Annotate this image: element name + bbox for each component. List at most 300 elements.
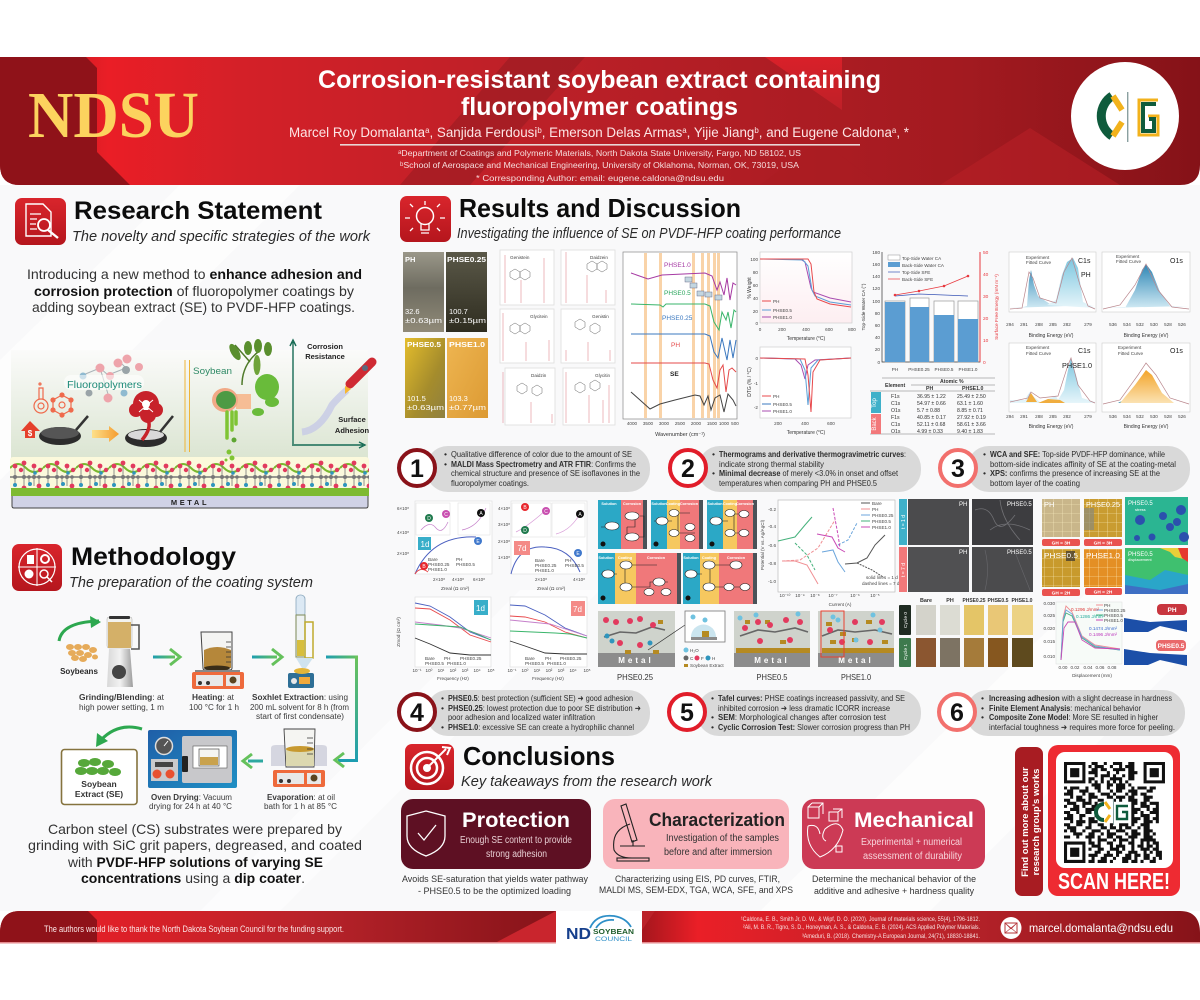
chart: TGA weight loss: 0	[755, 321, 758, 326]
panel: conclusions	[401, 741, 1180, 896]
text: mechanical note: Determine the mechanical behavior of the	[812, 874, 976, 884]
chart: ATR-FTIR spectra	[623, 252, 739, 438]
chart: water contact angle and surface free energy: 60	[875, 323, 880, 328]
chart: EIS Bode 7d: Frequency (Hz)	[532, 676, 564, 681]
card: mechanical: assessment of durability	[863, 851, 962, 862]
chart: XPS spectra: Binding Energy (eV)	[1124, 333, 1169, 339]
footer banner	[0, 911, 1200, 947]
chart: ATR-FTIR spectra: 2500	[675, 421, 686, 426]
photos: coating thickness: PH	[405, 255, 415, 264]
chart: peel force vs displacement: 0.04	[1084, 665, 1093, 670]
chart: ATR-FTIR spectra: PHSE0.5	[664, 290, 691, 297]
chart: XPS spectra: O1s	[1170, 258, 1183, 265]
chart: EIS Nyquist 1d: 4×10⁸	[397, 530, 409, 535]
chart: TGA weight loss: 20	[753, 309, 758, 314]
callout 2: temperatures when comparing PH and PHSE0.5	[719, 478, 877, 488]
chart: derivative thermogravimetry: 600	[827, 421, 835, 426]
QR code	[1064, 762, 1165, 863]
chart: derivative thermogravimetry: DTG (% / °C)	[747, 367, 753, 397]
chart: peel force vs displacement: PHSE1.0	[1104, 618, 1123, 623]
table: atomic percent: PHSE1.0	[962, 386, 983, 392]
chart: peel force vs displacement: 0.00	[1059, 665, 1068, 670]
callout 4: PHSE0.25: lowest protection due to poor SE distribution ➜	[448, 703, 641, 713]
chart: ATR-FTIR spectra: 1500	[707, 421, 718, 426]
callout 4: PHSE1.0: excessive SE can create a hydrophilic channel	[448, 722, 634, 732]
authors: b	[754, 126, 759, 135]
chart: TGA weight loss: Temperature (°C)	[787, 336, 826, 342]
chart: peel force vs displacement: 0.1286 J/mm²	[1076, 614, 1105, 619]
images: cyclic corrosion test photos: Bare	[920, 598, 932, 604]
text: protection note: Avoids SE-saturation that yields water pathway	[402, 874, 588, 884]
chart: XPS spectra: C1s	[1078, 258, 1091, 265]
chart: EIS Bode 1d: PHSE0.25	[460, 656, 482, 661]
chart: XPS spectra: Fitted Curve	[1116, 259, 1141, 264]
step: grinding and blending: Grinding/Blending : at	[79, 693, 165, 702]
affiliations: ᵇSchool of Aerospace and Mechanical Engineering, University of Oklahoma, Norman, OK, 73019, USA	[400, 160, 799, 170]
chart: EIS Nyquist 7d: PHSE0.25	[535, 563, 557, 568]
diagram: equivalent circuits	[598, 500, 757, 604]
callout 4: •	[441, 693, 444, 703]
images: cyclic corrosion test photos	[899, 598, 1033, 667]
chart: EIS Nyquist 1d: C	[444, 512, 448, 518]
table: atomic percent: 54.97 ± 0.66	[917, 401, 946, 407]
QR centre logo	[1096, 799, 1128, 825]
chart: EIS Bode 1d: Zmod (Ω cm²)	[396, 617, 402, 647]
chart: Tafel polarization curves: 10⁻⁵	[870, 593, 880, 598]
chart: Tafel polarization curves: Potential (V vs. Ag/AgCl)	[760, 519, 765, 570]
chart: Tafel polarization curves: solid lines = 1 d	[866, 575, 898, 580]
table: atomic percent: C1s	[891, 401, 901, 407]
references: ³Ameduri, B. (2018). Chemistry-A European Journal, 24(71), 18830-18841.	[802, 933, 980, 940]
table: atomic percent: O1s	[891, 408, 901, 414]
chart: EIS Nyquist 7d: 3×10⁸	[498, 522, 510, 527]
table: atomic percent: F1s	[891, 394, 900, 400]
photos: coating thickness: PHSE0.5	[407, 340, 441, 349]
chart: EIS Bode 1d: Bare	[425, 656, 435, 661]
authors: , Emerson Delas Armas	[542, 125, 683, 140]
chart: XPS spectra: 528	[1164, 414, 1172, 419]
chart: EIS Nyquist 1d: 1d	[420, 540, 429, 549]
diagram: peel simulation PH and PHSE0.5: PH	[1167, 607, 1177, 614]
chart: TGA weight loss: 800	[848, 327, 856, 332]
chart: EIS Bode 1d: 10⁰	[426, 668, 433, 673]
chart: EIS Nyquist 7d: 4×10⁸	[498, 506, 510, 511]
chart: EIS Bode 7d: Bare	[525, 656, 535, 661]
diagram: PHSE0.5 coating	[734, 611, 810, 682]
images: SEM micrographs: PH	[959, 550, 967, 556]
images: cross-hatch adhesion test: GH = 2H	[1052, 590, 1071, 596]
chart: Tafel polarization curves: PHSE0.5	[872, 519, 891, 524]
metal substrate: METAL	[171, 498, 209, 507]
chart: ATR-FTIR spectra: 1000	[719, 421, 730, 426]
card: mechanical: Experimental + numerical	[861, 837, 962, 848]
chart: water contact angle and surface free energy: 30	[983, 294, 989, 300]
photos: coating thickness: 32.6	[405, 307, 420, 316]
card: protection: Protection	[462, 809, 570, 832]
chart: ATR-FTIR spectra: 3000	[659, 421, 670, 426]
ND Soybean Council logo: SOYBEAN	[593, 927, 634, 936]
chart: water contact angle and surface free energy: Back-Side SFE	[902, 277, 933, 282]
chart: Tafel polarization curves: 10⁻⁸	[810, 593, 820, 598]
photos: coating thickness: ±0.63µm	[407, 403, 444, 412]
callout 5: •	[711, 722, 714, 732]
chart: peel force vs displacement: Displacement (mm)	[1072, 673, 1112, 678]
chart: EIS Bode 1d: PHSE1.0	[447, 661, 466, 666]
chart: peel force vs displacement: 0.02	[1071, 665, 1080, 670]
images: cyclic corrosion test photos: PHSE0.5	[988, 598, 1008, 604]
chart: EIS Bode 1d: 1d	[476, 604, 485, 613]
chart: EIS Bode 7d: 10⁻¹	[507, 668, 517, 673]
text: protection note	[402, 874, 588, 896]
step: soxhlet extraction: start of first condensate)	[256, 712, 344, 721]
images: cross-hatch adhesion test: GH = 3H	[1094, 540, 1113, 546]
panel: results and discussion	[396, 193, 1190, 736]
chart: ATR-FTIR spectra: 500	[731, 421, 739, 426]
chart: EIS Bode 7d: PH	[545, 656, 551, 661]
diagram: equivalent circuits: Corrosion	[736, 502, 755, 506]
arrow	[252, 649, 282, 665]
diagram: equivalent circuits: Coating	[702, 556, 717, 560]
chart: EIS Nyquist 1d: Zreal (Ω cm²)	[441, 586, 470, 592]
callout 2: •	[712, 449, 715, 459]
callout 1: Qualitative difference of color due to the amount of SE	[451, 449, 632, 459]
chart: EIS Bode 7d: 10²	[546, 668, 553, 673]
callout 1: MALDI Mass Spectrometry and ATR FTIR: Confirms the	[451, 459, 636, 469]
chart: water contact angle and surface free energy: PHSE1.0	[959, 367, 978, 372]
callout 6: Finite Element Analysis: mechanical behavior	[989, 703, 1141, 713]
images: SEM micrographs: PHSE0.5	[1007, 502, 1032, 508]
diagram: PHSE0.25 coating	[598, 611, 725, 682]
ND Soybean Council logo	[566, 916, 634, 943]
callout 6: •	[981, 693, 984, 703]
chart: EIS Bode 7d: 7d	[573, 605, 582, 614]
authors: Marcel Roy Domalanta	[289, 125, 426, 140]
callout 4	[399, 690, 650, 736]
chart: corrosion resistance vs surface adhesion	[290, 340, 372, 448]
photos: coating thickness: ±0.77µm	[449, 403, 486, 412]
arrow	[153, 649, 180, 665]
chart: EIS Nyquist 7d: PHSE1.0	[535, 568, 554, 573]
heading: Methodology	[71, 543, 236, 571]
chart: XPS spectra: PHSE1.0	[1062, 363, 1092, 370]
heading: Research Statement	[74, 197, 323, 225]
chart: EIS Bode 1d: 10⁴	[473, 668, 481, 673]
label: fluoropolymers: Fluoropolymers	[67, 379, 142, 391]
chart: water contact angle and surface free energy	[861, 250, 1000, 372]
step: oven drying	[148, 730, 237, 811]
table: atomic percent: 5.7 ± 0.88	[917, 408, 940, 414]
chart: peel force vs displacement: 0.1474 J/mm²	[1089, 626, 1118, 631]
images: SEM micrographs: t = 7 d	[901, 563, 907, 577]
chart: derivative thermogravimetry: Temperature (°C)	[787, 430, 826, 436]
callout 6: •	[981, 703, 984, 713]
chart: ATR-FTIR spectra: SE	[670, 371, 679, 378]
chart: XPS spectra: 526	[1178, 414, 1186, 419]
diagram: PHSE1.0 coating: Metal	[838, 656, 874, 665]
chart: EIS Nyquist 1d: 4×10⁸	[452, 577, 464, 582]
poster title: Corrosion-resistant soybean extract containing	[318, 66, 881, 94]
chart: water contact angle and surface free energy: 160	[872, 262, 880, 267]
chart: EIS Nyquist 1d: PH	[456, 557, 462, 562]
chart: water contact angle and surface free energy: Surface Free Energy (mN m⁻¹)	[994, 274, 1000, 340]
step: heating: Heating: at	[192, 693, 235, 702]
images: cross-hatch adhesion test: PHSE0.25	[1086, 500, 1120, 509]
step: oven drying: Oven Drying: Vacuum	[151, 793, 232, 802]
diagram: equivalent circuits: Solution	[601, 502, 617, 506]
images: finite element analysis contours: PHSE0.5	[1128, 552, 1153, 558]
images: cyclic corrosion test photos: PHSE0.25	[962, 598, 986, 604]
chart: EIS Nyquist 1d: 6×10⁸	[397, 506, 409, 511]
chart: water contact angle and surface free energy: Top-Side Water CA (°)	[861, 283, 867, 331]
diagram: equivalent circuits: Corrosion	[680, 502, 699, 506]
callout 6: Composite Zone Model: More SE resulted in higher	[989, 712, 1158, 722]
text: mechanical note	[812, 874, 976, 896]
chart: corrosion resistance vs surface adhesion: Resistance	[305, 352, 345, 361]
chart: corrosion resistance vs surface adhesion: Surface	[338, 415, 366, 424]
arrow	[92, 426, 119, 442]
chart: EIS Nyquist 1d: B	[422, 564, 426, 570]
icon: light bulb	[400, 196, 451, 242]
callout 5: Tafel curves: PHSE coatings increased passivity, and SE	[718, 693, 905, 703]
chart: EIS Bode 1d: PHSE0.5	[425, 661, 444, 666]
chart: Tafel polarization curves: -0.8	[768, 561, 776, 566]
chart: water contact angle and surface free energy: 100	[872, 299, 880, 304]
chart: XPS spectra: 528	[1164, 322, 1172, 327]
chart: EIS Nyquist 1d: 2×10⁸	[397, 551, 409, 556]
text: mechanical note: additive and adhesive + hardness quality	[814, 886, 974, 896]
chart: derivative thermogravimetry: -1	[754, 381, 758, 386]
chart: EIS Nyquist 1d: A	[479, 511, 483, 517]
icon: target	[405, 744, 454, 790]
chart: XPS spectra: Experiment	[1116, 254, 1140, 259]
callout 3: bottom layer of the coating	[990, 478, 1080, 488]
chart: water contact angle and surface free energy: PH	[892, 367, 898, 372]
references	[741, 916, 980, 940]
callout 2: 2	[681, 455, 695, 483]
chart: TGA weight loss: PHSE1.0	[773, 315, 792, 320]
chart: peel force vs displacement: PH	[1104, 603, 1110, 608]
images: cross-hatch adhesion test: PHSE1.0	[1086, 551, 1120, 560]
chart: derivative thermogravimetry: PHSE0.5	[773, 402, 792, 407]
chart: Tafel polarization curves: 10⁻⁹	[795, 593, 805, 598]
callout 5: 5	[680, 699, 694, 727]
diagram: PHSE0.5 coating: PHSE0.5	[756, 672, 788, 682]
step: grinding and blending: high power setting, 1 m	[79, 703, 164, 712]
images: cyclic corrosion test photos: Cycle 0	[903, 612, 909, 628]
callout 2: •	[712, 468, 715, 478]
icon: cost arrow: $	[28, 429, 33, 438]
chart: XPS spectra: 530	[1150, 322, 1158, 327]
chart: XPS spectra: 532	[1136, 414, 1144, 419]
subheading: Key takeaways from the research work	[461, 774, 713, 790]
chart: derivative thermogravimetry: 0	[755, 356, 758, 361]
chart: ATR-FTIR spectra: 4000	[627, 421, 638, 426]
images: finite element analysis contours: stress	[1135, 507, 1146, 512]
chart: TGA weight loss: 80	[753, 270, 758, 275]
chart: EIS Bode 1d: 10¹	[438, 668, 445, 673]
table: atomic percent: Top	[872, 398, 878, 408]
photos: coating thickness: ±0.15µm	[449, 316, 486, 325]
chart: TGA weight loss: 400	[802, 327, 810, 332]
chart: water contact angle and surface free energy: 120	[872, 286, 880, 291]
photos: coating thickness	[403, 252, 488, 418]
text: characterization note: MALDI MS, SEM-EDX, TGA, WCA, SFE, and XPS	[599, 885, 793, 895]
callout 1: 1	[410, 455, 424, 483]
card: characterization: Investigation of the samples	[666, 833, 779, 844]
chart: Tafel polarization curves: PHSE0.25	[872, 513, 894, 518]
diagram: PHSE1.0 coating	[818, 611, 894, 682]
subheading: The novelty and specific strategies of the work	[72, 228, 371, 245]
callout 4: poor adhesion and localized water infiltration	[448, 712, 595, 722]
chart: XPS spectra: 288	[1035, 322, 1043, 327]
text: protection note: - PHSE0.5 to be the optimized loading	[418, 886, 571, 896]
chart: Tafel polarization curves: Current (A)	[829, 602, 852, 607]
chart: corrosion resistance vs surface adhesion: Corrosion	[307, 342, 343, 351]
callout 2	[670, 446, 921, 492]
chart: EIS Nyquist 1d: 2×10⁸	[433, 577, 445, 582]
chart: XPS spectra: PH	[1081, 272, 1091, 279]
step: evaporation	[264, 729, 337, 811]
chart: derivative thermogravimetry	[747, 347, 851, 436]
callout 3: •	[983, 468, 986, 478]
label: soybean: Soybean	[193, 366, 232, 377]
callout 5	[669, 690, 921, 736]
chart: water contact angle and surface free energy: 40	[983, 272, 989, 278]
ND Soybean Council logo: ND	[566, 926, 591, 943]
chart: peel force vs displacement: 0.1296 J/mm²	[1071, 607, 1100, 612]
table: atomic percent: 27.92 ± 0.19	[957, 415, 986, 421]
chart: EIS Bode 7d: PHSE1.0	[547, 661, 566, 666]
chart: EIS Bode 7d: 10⁴	[569, 668, 577, 673]
chart: ATR-FTIR spectra: PHSE0.25	[662, 315, 693, 322]
chart: EIS Nyquist 1d: PHSE0.5	[456, 562, 475, 567]
diagram: equivalent circuits: Corrosion	[623, 502, 642, 506]
chart: XPS spectra: 288	[1035, 414, 1043, 419]
panel: methodology	[12, 543, 362, 886]
chart: EIS Bode 7d	[507, 597, 591, 681]
chart: EIS Bode 7d: PHSE0.5	[525, 661, 544, 666]
poster title	[318, 66, 881, 121]
images: SEM micrographs: t = 1 d	[901, 515, 907, 529]
chart: XPS spectra	[1006, 252, 1190, 430]
chart: XPS spectra: Binding Energy (eV)	[1124, 424, 1169, 430]
chart: derivative thermogravimetry: PHSE1.0	[773, 409, 792, 414]
acknowledgement: The authors would like to thank the North Dakota Soybean Council for the funding support.	[44, 924, 344, 934]
chart: Tafel polarization curves: 10⁻¹⁰	[780, 593, 791, 598]
chart: Tafel polarization curves: -0.2	[768, 507, 776, 512]
images: finite element analysis contours: PHSE0.5	[1128, 501, 1153, 507]
intro text: adding soybean extract (SE) to PVDF-HFP coatings.	[32, 299, 355, 315]
chart: water contact angle and surface free energy: 10	[983, 338, 989, 344]
chart: peel force vs displacement	[1044, 601, 1126, 678]
chart: TGA weight loss: PHSE0.5	[773, 308, 792, 313]
chart: ATR-FTIR spectra: PHSE1.0	[664, 262, 691, 269]
chart: EIS Nyquist 1d: 6×10⁸	[473, 577, 485, 582]
card: protection: Enough SE content to provide	[460, 835, 572, 846]
chart: peel force vs displacement: PHSE0.5	[1104, 613, 1123, 618]
step: soybean extract box: Extract (SE)	[75, 789, 123, 799]
step: heating	[189, 632, 244, 712]
chart: Tafel polarization curves: PH	[872, 507, 878, 512]
chart: EIS Nyquist 7d: 2×10⁸	[535, 577, 547, 582]
table: atomic percent: Back	[872, 416, 878, 431]
diagram: PHSE0.5 coating: Metal	[754, 656, 790, 665]
chart: EIS Nyquist 1d: PHSE1.0	[428, 567, 447, 572]
chart: EIS Nyquist 1d	[397, 501, 492, 592]
authors: , and Eugene Caldona	[759, 125, 892, 140]
chart: XPS spectra: 536	[1109, 322, 1117, 327]
chart: XPS spectra: 536	[1109, 414, 1117, 419]
chart: EIS Bode 1d: Frequency (Hz)	[437, 676, 469, 681]
diagram: equivalent circuits: Solution	[651, 502, 667, 506]
callout 4: PHSE0.5: best protection (sufficient SE) ➜ good adhesion	[448, 693, 633, 703]
chart: EIS Bode 1d: 10⁵	[487, 668, 495, 673]
text: characterization note: Characterizing using EIS, PD curves, FTIR,	[615, 874, 780, 884]
chart: EIS Bode 1d: 10²	[450, 668, 457, 673]
callout 3: 3	[951, 455, 965, 483]
callout 2: indicate strong thermal stability	[719, 459, 825, 469]
subheading: The preparation of the coating system	[69, 574, 313, 591]
callout 6	[939, 690, 1185, 736]
icon: email	[1000, 917, 1022, 939]
chart: water contact angle and surface free energy: Top-Side Water CA	[902, 256, 942, 261]
chart: EIS Nyquist 7d: C	[544, 509, 548, 515]
table: atomic percent: Atomic %	[940, 379, 964, 385]
photos: coating thickness: PHSE0.25	[447, 255, 486, 264]
photos: coating thickness: 101.5	[407, 394, 426, 403]
chart: EIS Bode 1d: 10³	[462, 668, 469, 673]
diagram: PHSE0.25 coating: H	[712, 656, 715, 661]
references: ²Ali, M. B. R., Tigno, S. D., Honeyman, A. S., & Caldona, E. B. (2024). ACS Applied Polymer Materials.	[743, 924, 980, 931]
chart: peel force vs displacement: 0.030	[1044, 601, 1055, 606]
callout 6: interfacial toughness ➜ requires more force for peeling.	[989, 722, 1175, 732]
chart: EIS Bode 1d: 10⁻¹	[412, 668, 422, 673]
step: soxhlet extraction	[250, 595, 349, 721]
images: cross-hatch adhesion test: GH = 3H	[1052, 540, 1071, 546]
chart: EIS Nyquist 7d	[498, 501, 587, 592]
diagram: equivalent circuits: Solution	[707, 502, 723, 506]
chart: corrosion resistance vs surface adhesion: Adhesion	[335, 426, 370, 435]
chart: XPS spectra: 534	[1123, 414, 1131, 419]
callout 1	[399, 446, 650, 492]
step: soxhlet extraction: Soxhlet Extraction: using	[252, 693, 348, 702]
step: soybean extract box	[62, 727, 142, 804]
card: mechanical: Mechanical	[854, 809, 974, 832]
chart: EIS Bode 7d: 10⁰	[522, 668, 529, 673]
chart: MALDI mass spectra: Genistein	[510, 255, 530, 260]
icon: clean pan	[39, 416, 88, 445]
table: atomic percent: 36.95 ± 1.22	[917, 394, 946, 400]
step: evaporation: bath for 1 h at 85 °C	[264, 802, 337, 811]
chart: water contact angle and surface free energy: 80	[875, 311, 880, 316]
text: substrate preparation: grinding with SiC grit papers, degreased, and coated	[28, 837, 362, 853]
chart: TGA weight loss: 0	[759, 327, 762, 332]
affiliations: ᵃDepartment of Coatings and Polymeric Materials, North Dakota State University, Fargo, ND 58102, US	[398, 148, 801, 158]
callout 6: •	[981, 712, 984, 722]
table: atomic percent: C1s	[891, 422, 901, 428]
step: oven drying: drying for 24 h at 40 °C	[149, 802, 232, 811]
chart: XPS spectra: Experiment	[1026, 255, 1050, 260]
chart: derivative thermogravimetry: 200	[774, 421, 782, 426]
NDSU logo: NDSU	[28, 79, 199, 152]
step: soxhlet extraction: 200 mL solvent for 8 h (from	[250, 703, 349, 712]
chart: water contact angle and surface free energy: 50	[983, 250, 989, 256]
intro text: corrosion protection of fluoropolymer coatings by	[34, 283, 354, 299]
callout 4: •	[441, 722, 444, 732]
images: SEM micrographs: PHSE0.5	[1007, 550, 1032, 556]
callout 5: •	[711, 712, 714, 722]
authors: b	[537, 126, 542, 135]
